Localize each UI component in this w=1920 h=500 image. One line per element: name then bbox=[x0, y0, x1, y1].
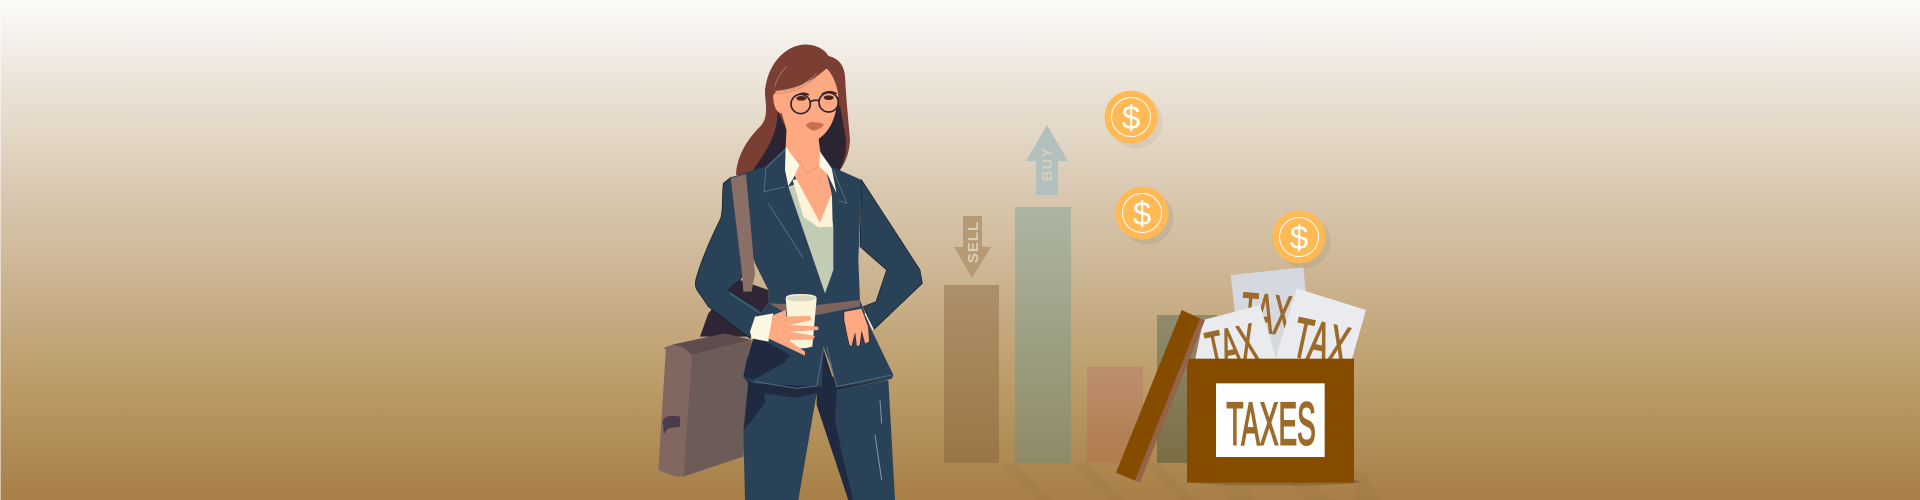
icon: coin 3: $ bbox=[1290, 219, 1308, 256]
glasses bbox=[791, 93, 838, 114]
box label bbox=[1216, 383, 1325, 458]
hand on hip bbox=[844, 308, 869, 347]
arrow: sell: SELL bbox=[965, 221, 982, 263]
hair back bbox=[736, 45, 850, 175]
sleeve cuff bbox=[750, 313, 773, 342]
paper: left: TAX bbox=[1201, 313, 1262, 382]
right arm sleeve bbox=[860, 180, 922, 330]
shirt cream inner collar bbox=[793, 173, 833, 227]
collar bbox=[785, 147, 837, 193]
box label: TAXES bbox=[1226, 391, 1316, 458]
neck shadow lines bbox=[787, 117, 822, 173]
lips and nose bbox=[806, 122, 824, 131]
paper: back bbox=[1231, 267, 1308, 358]
bar chart bbox=[944, 207, 1217, 463]
jacket vent shadow bbox=[817, 343, 837, 393]
box lid bbox=[1116, 310, 1205, 482]
face bbox=[773, 68, 838, 140]
neck and chest skin bbox=[786, 127, 832, 223]
sell bar bbox=[944, 285, 999, 463]
hair highlights bbox=[774, 67, 817, 93]
paper: right: TAX bbox=[1288, 307, 1354, 380]
box front bbox=[1187, 359, 1354, 483]
buy bar bbox=[1015, 207, 1071, 463]
trousers bbox=[743, 357, 895, 500]
left arm sleeve bbox=[695, 177, 761, 338]
arrow: sell bbox=[954, 216, 991, 278]
hip cuff bbox=[865, 313, 873, 330]
floor shadows of the bars bbox=[999, 463, 1380, 500]
paper: back: TAX bbox=[1239, 281, 1294, 347]
jacket dark fold by hand bbox=[743, 335, 790, 380]
paper: left bbox=[1195, 305, 1277, 382]
box ground shadow bbox=[1192, 478, 1361, 486]
tax box with papers bbox=[1116, 267, 1366, 486]
fourth bar bbox=[1157, 315, 1217, 463]
jacket seams bbox=[730, 149, 892, 388]
hair front bbox=[765, 45, 846, 107]
coffee cup bbox=[786, 294, 817, 348]
jacket torso bbox=[731, 147, 893, 387]
icon: coin 3 bbox=[1272, 210, 1330, 268]
woman figure bbox=[658, 45, 922, 500]
briefcase bbox=[658, 333, 752, 477]
icon: coin 1 bbox=[1104, 90, 1162, 148]
belt bbox=[769, 300, 860, 315]
eyebrows and eyes bbox=[796, 91, 837, 101]
dark gap behind arm bbox=[700, 280, 768, 337]
icon: coin 2: $ bbox=[1133, 195, 1151, 232]
shoulder strap bbox=[731, 174, 755, 292]
arrow: buy bbox=[1026, 125, 1068, 195]
hair shadow bbox=[750, 105, 846, 174]
arrow: buy: BUY bbox=[1039, 147, 1056, 181]
third bar bbox=[1087, 367, 1143, 463]
shirt bbox=[788, 173, 833, 293]
paper: right bbox=[1275, 288, 1366, 380]
icon: coin 1: $ bbox=[1122, 99, 1140, 136]
icon: coin 2 bbox=[1116, 186, 1174, 244]
hand on cup bbox=[768, 310, 818, 356]
